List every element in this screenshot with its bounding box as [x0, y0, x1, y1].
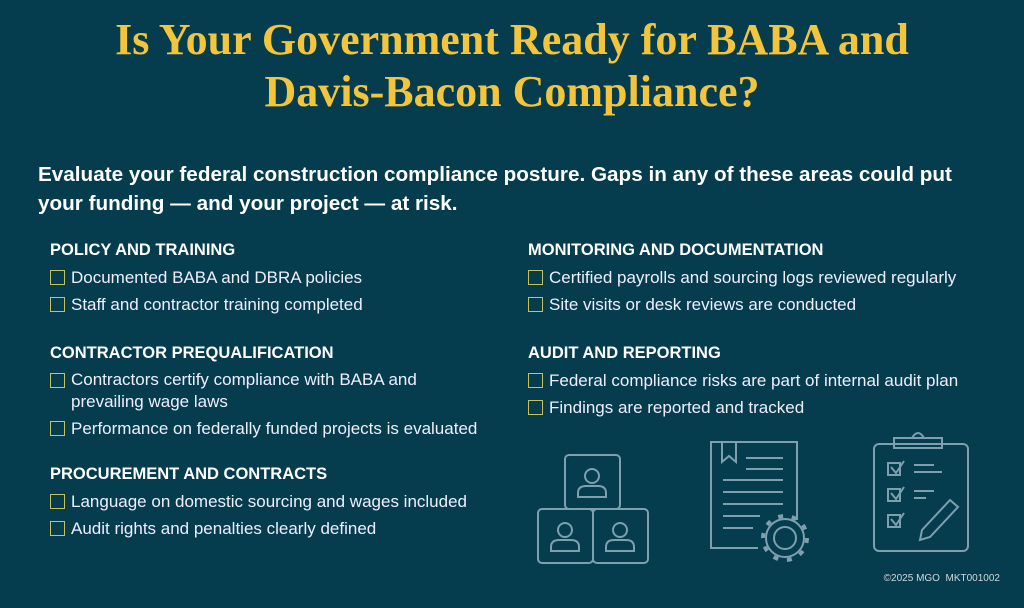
panel: contractor prequalification: CONTRACTOR PREQUALIFICATION	[50, 344, 334, 362]
panel: audit and reporting: Federal compliance risks are part of internal audit plan	[549, 371, 958, 390]
panel: policy and training: POLICY AND TRAINING	[50, 241, 235, 259]
title: Davis-Bacon Compliance?	[264, 67, 760, 116]
intro text: your funding — and your project — at risk.	[38, 192, 458, 215]
panel: audit and reporting: Findings are reported and tracked	[549, 398, 804, 417]
panel: contractor prequalification: Contractors certify compliance with BABA and	[71, 370, 417, 389]
title	[115, 15, 909, 116]
panel: procurement and contracts: Audit rights and penalties clearly defined	[71, 519, 376, 538]
panel: contractor prequalification: Performance on federally funded projects is evaluated	[71, 419, 477, 438]
panel: audit and reporting: AUDIT AND REPORTING	[528, 344, 721, 362]
panel: monitoring and documentation	[528, 241, 956, 314]
icon: clipboard checklist	[874, 433, 968, 551]
panel: monitoring and documentation: MONITORING AND DOCUMENTATION	[528, 241, 823, 259]
intro text: Evaluate your federal construction compliance posture. Gaps in any of these areas could put	[38, 163, 952, 186]
title: Is Your Government Ready for BABA and	[115, 15, 909, 64]
panel: monitoring and documentation: Site visits or desk reviews are conducted	[549, 295, 856, 314]
panel: policy and training	[50, 241, 363, 314]
panel: procurement and contracts	[50, 465, 467, 538]
panel: contractor prequalification: prevailing wage laws	[71, 392, 228, 411]
panel: policy and training: Staff and contractor training completed	[71, 295, 363, 314]
panel: monitoring and documentation: Certified payrolls and sourcing logs reviewed regularly	[549, 268, 956, 287]
copyright: ©2025 MGO MKT001002	[884, 573, 1000, 584]
panel: contractor prequalification	[50, 344, 477, 438]
icon: document with gear	[711, 442, 807, 560]
intro text	[38, 163, 952, 215]
icon: people blocks	[538, 455, 648, 563]
panel: policy and training: Documented BABA and DBRA policies	[71, 268, 362, 287]
panel: procurement and contracts: PROCUREMENT AND CONTRACTS	[50, 465, 327, 483]
panel: audit and reporting	[528, 344, 958, 417]
panel: procurement and contracts: Language on domestic sourcing and wages included	[71, 492, 467, 511]
